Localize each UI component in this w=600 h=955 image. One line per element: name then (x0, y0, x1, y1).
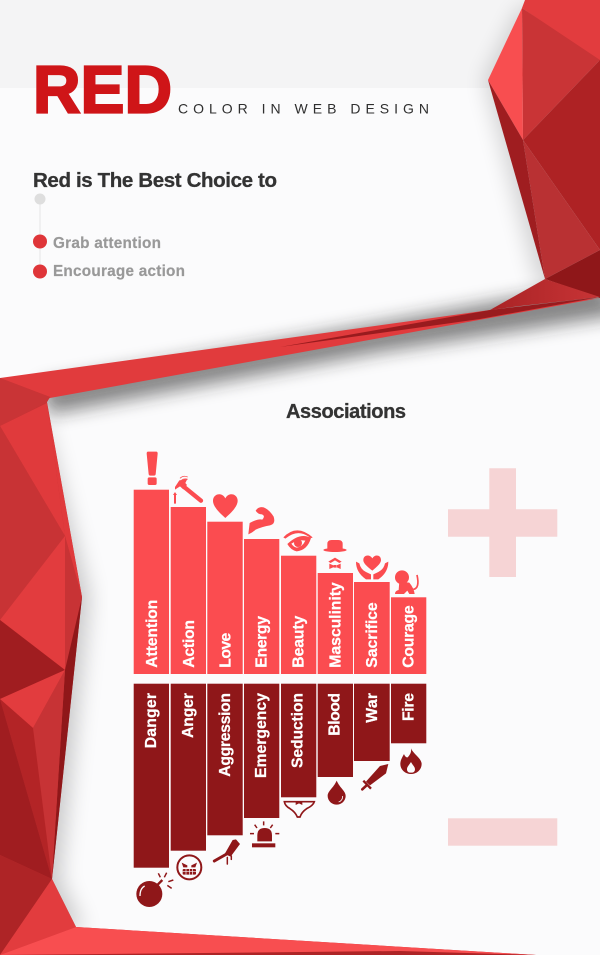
icon: blood drop (328, 781, 346, 805)
bar: Seduction: Seduction (290, 693, 306, 768)
icon: exclamation mark (147, 452, 158, 485)
bar: Fire: Fire (400, 693, 418, 721)
bar: Sacrifice: Sacrifice (364, 602, 381, 668)
bar: Emergency (244, 684, 279, 818)
icon: minus (448, 818, 557, 846)
bar: Energy: Energy (254, 616, 270, 668)
panel: diagonal red ribbon (0, 279, 600, 420)
list: best choice bullets (33, 194, 185, 280)
bar: War (354, 684, 390, 761)
bar: Blood: Blood (326, 693, 344, 736)
bar: Love: Love (218, 632, 234, 668)
bar: Seduction (281, 684, 316, 797)
bar: Anger (171, 684, 206, 851)
bar: Masculinity: Masculinity (328, 582, 344, 668)
chart: positive associations (134, 490, 426, 674)
icon: eye (283, 530, 313, 551)
bar: War: War (364, 693, 381, 723)
bar: Energy (244, 539, 279, 674)
bar: Love (207, 522, 243, 674)
icons: positive associations (147, 452, 274, 534)
icon: lion (395, 570, 418, 594)
panel: left red polygon shape (0, 378, 536, 955)
icon: flexed arm (248, 507, 274, 534)
bar: Aggression: Aggression (217, 693, 234, 777)
icon: flame (400, 748, 422, 774)
bar: Sacrifice (354, 582, 390, 674)
bar: Courage (391, 597, 426, 674)
icon: sword (362, 764, 388, 789)
icon: underwear (284, 801, 314, 817)
subtitle: COLOR IN WEB DESIGN (178, 100, 429, 116)
bar: Masculinity (318, 573, 353, 674)
bar: Action: Action (181, 620, 198, 668)
bar: Beauty: Beauty (290, 615, 308, 668)
bar: Fire (391, 684, 426, 743)
icon: masculine chevron and bow tie (328, 558, 342, 569)
icon: hammer (173, 476, 201, 504)
bar: Attention (134, 490, 169, 674)
icon: hands holding heart (356, 555, 388, 579)
heading: associations: Associations (286, 401, 406, 423)
icon: heart (213, 494, 238, 518)
bar: Danger: Danger (143, 693, 160, 748)
bar: Blood (318, 684, 353, 777)
bar: Attention: Attention (144, 600, 161, 668)
bar: Emergency: Emergency (253, 693, 270, 778)
bar: Danger (134, 684, 169, 868)
bar: Courage: Courage (400, 605, 418, 668)
bar: Beauty (281, 556, 316, 674)
list: best choice bullets: Grab attention (53, 235, 161, 252)
panel: top-right red polygon shape (488, 0, 600, 298)
icon: bomb (136, 873, 173, 907)
icon: plus (448, 468, 557, 577)
chart: negative associations (134, 684, 426, 868)
icon: bowler hat (323, 540, 347, 552)
icon: angry face (177, 855, 201, 879)
bar: Action (171, 507, 206, 674)
heading: best choice: Red is The Best Choice to (33, 169, 277, 192)
icons: negative associations (136, 821, 279, 907)
icon: bloody cleaver (214, 839, 240, 864)
bar: Aggression (207, 684, 243, 835)
list: best choice bullets: Encourage action (53, 263, 185, 280)
bar: Anger: Anger (180, 693, 197, 738)
title: RED (33, 52, 172, 128)
icon: siren (250, 821, 279, 847)
